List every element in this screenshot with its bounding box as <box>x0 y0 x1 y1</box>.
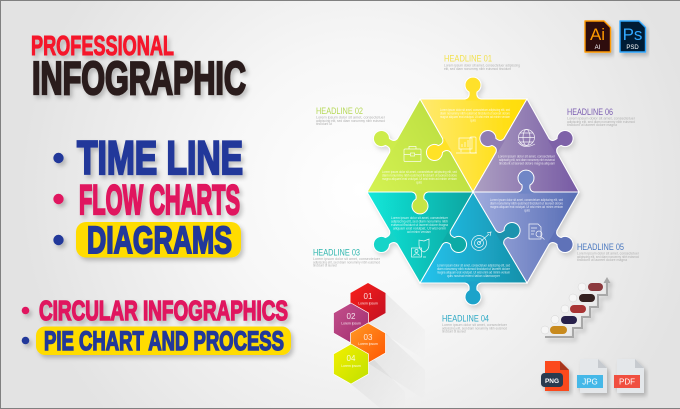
icon: globe <box>518 130 535 147</box>
list item: time line: TIME LINE <box>77 131 243 184</box>
callout: headline 06: Lorem ipsum dolor sit amet, consectetuer <box>567 116 636 120</box>
hexagon 03 <box>350 323 386 363</box>
hexagon 04: Lorem ipsum <box>341 364 361 368</box>
callout: headline 04: Lorem ipsum dolor sit amet, consectetuer <box>442 323 508 327</box>
title: professional infographic: INFOGRAPHIC <box>32 52 246 104</box>
callout: headline 04: adipiscing elit, sed diam nonummy nibh euismod <box>442 326 507 330</box>
text block: periwinkle piece copy <box>490 198 563 212</box>
text block: teal piece copy: euismod tincidunt ut laoreet dolore magna <box>391 223 448 227</box>
icon: photoshop file: PSD <box>626 45 639 51</box>
text block: yellow piece copy: Lorem ipsum dolor sit amet, consectetuer adipiscing elit, sed <box>440 108 510 112</box>
hexagon 03: 03 <box>364 333 373 342</box>
title: professional infographic <box>31 30 246 104</box>
callout: headline 05 <box>577 242 640 262</box>
text block: green piece copy <box>382 170 457 184</box>
step 3 <box>561 305 586 313</box>
piece: green triangle <box>367 99 473 192</box>
icon: photoshop file <box>620 21 646 52</box>
text block: blue piece copy: quis nostrud exerci tation ullamcorper <box>447 274 501 278</box>
text block: teal piece copy <box>391 216 449 234</box>
text block: purple piece copy: Lorem ipsum dolor sit amet, consectetuer <box>498 154 556 158</box>
puzzle hexagon diagram <box>367 77 579 305</box>
callout: headline 06: tincidunt ut laoreet dolore magna <box>567 123 617 127</box>
callout: headline 02: tincidunt ut <box>316 122 332 126</box>
callout: headline 06: HEADLINE 06 <box>567 107 613 117</box>
arrow: staircase line <box>545 277 610 337</box>
text block: green piece copy: magna aliquam erat volutpat. Ut wisi enim ad minim veniam <box>382 177 457 181</box>
callout: headline 03: Lorem ipsum dolor sit amet, consectetuer <box>313 257 381 261</box>
callout: headline 06: adipiscing elit, sed diam nonummy nibh euismod <box>567 120 635 124</box>
list item: flow charts <box>53 176 240 223</box>
text block: blue piece copy: diam nonummy nibh euismod tincidunt ut laoreet dolore <box>437 267 510 271</box>
text block: periwinkle piece copy: Lorem ipsum dolor sit amet, consectetuer adipiscing elit, sed <box>490 198 563 202</box>
text block: teal piece copy: Lorem ipsum dolor sit amet, consectetuer <box>391 216 449 220</box>
text block: yellow piece copy: quis <box>470 118 476 122</box>
step 1 <box>541 326 567 334</box>
list item: flow charts: FLOW CHARTS <box>79 176 240 223</box>
text block: blue piece copy <box>437 264 510 278</box>
step 5 <box>578 283 603 291</box>
text block: purple piece copy: tincidunt ut laoreet dolore magna aliquam <box>499 162 555 166</box>
hexagon 04 <box>334 344 368 384</box>
piece: teal triangle <box>367 192 473 283</box>
piece: yellow triangle <box>420 99 527 192</box>
piece: blue triangle <box>420 192 527 283</box>
text block: blue piece copy: Lorem ipsum dolor sit amet, consectetuer adipiscing elit, sed <box>437 264 510 268</box>
callout: headline 01: HEADLINE 01 <box>444 54 492 64</box>
text block: teal piece copy: ad minim veniam <box>407 230 431 234</box>
text block: teal piece copy: adipiscing elit, sed diam nonummy nibh <box>391 220 448 224</box>
callout: headline 03: tincidunt ut laoreet <box>313 264 337 268</box>
icon: chart and devices <box>456 137 477 153</box>
text block: yellow piece copy: magna aliquam erat volutpat. Ut wisi enim ad minim veniam <box>440 115 510 119</box>
hexagon 03: Lorem ipsum <box>358 342 378 346</box>
callout: headline 05: Lorem ipsum dolor sit amet, consectetuer <box>577 252 640 256</box>
callout: headline 05: tincidunt ut laoreet dolore magna <box>577 258 627 262</box>
callout: headline 03: HEADLINE 03 <box>313 248 360 258</box>
hexagon 04: 04 <box>347 354 356 363</box>
list item: diagrams: DIAGRAMS <box>87 220 232 262</box>
callout: headline 03: adipiscing elit, sed diam nonummy nibh euismod <box>313 260 380 264</box>
piece: periwinkle triangle <box>473 192 579 283</box>
text block: periwinkle piece copy: magna aliquam erat volutpat. Ut wisi enim ad minim veniam <box>490 205 563 209</box>
text block: teal piece copy: aliquam erat volutpat. Ut wisi enim <box>393 226 446 230</box>
hexagon 01: Lorem ipsum <box>358 302 378 306</box>
callout: headline 02: adipiscing elit, sed diam nonummy nibh euismod <box>316 119 385 123</box>
icon: png file: PNG <box>545 378 559 385</box>
callout: headline 02 <box>316 106 386 126</box>
hexagon 02: 02 <box>347 312 356 321</box>
icon: photoshop file: Ps <box>623 25 642 44</box>
hexagon 02 <box>334 303 368 343</box>
callout: headline 01: elit, sed diam nonummy nibh euismod tincidunt <box>444 67 511 71</box>
callout: headline 02: Lorem ipsum dolor sit amet, consectetuer <box>316 116 386 120</box>
list item: circular infographics <box>22 295 288 326</box>
list item: circular infographics: CIRCULAR INFOGRAPHICS <box>39 295 288 326</box>
hexagon 01 <box>350 283 386 323</box>
icon: pdf file: PDF <box>619 378 635 386</box>
title: professional infographic: PROFESSIONAL <box>31 30 174 61</box>
list item: pie chart and process: PIE CHART AND PROCESS <box>44 326 284 356</box>
icon: briefcase <box>404 146 421 162</box>
list item: diagrams <box>53 220 241 262</box>
list item: time line <box>53 131 243 184</box>
staircase arrow process <box>541 277 610 337</box>
text block: blue piece copy: magna aliquam erat volutpat. Ut wisi enim ad minim veniam <box>437 270 510 274</box>
callout: headline 04 <box>442 314 508 334</box>
step 4 <box>569 294 595 302</box>
stacked hexagon process <box>334 283 425 408</box>
text block: periwinkle piece copy: diam nonummy nibh euismod tincidunt ut laoreet dolore <box>490 202 563 206</box>
icon: adobe illustrator file <box>585 21 610 52</box>
icon: png file <box>541 361 569 391</box>
callout: headline 05: HEADLINE 05 <box>577 242 624 252</box>
callout: headline 05: adipiscing elit, sed diam nonummy nibh euismod <box>577 255 639 259</box>
icon: adobe illustrator file: Ai <box>590 25 605 44</box>
callout: headline 02: HEADLINE 02 <box>316 106 363 116</box>
callout: headline 01: Lorem ipsum dolor sit amet, consectetuer adipiscing <box>444 64 520 68</box>
icon: pdf file <box>614 359 644 393</box>
step 2 <box>551 316 577 324</box>
text block: green piece copy: diam nonummy nibh euismod tincidunt ut laoreet dolore <box>382 174 457 178</box>
callout: headline 01 <box>444 54 520 71</box>
text block: yellow piece copy <box>440 108 510 122</box>
list item: pie chart and process <box>22 326 291 356</box>
icon: badge and shield <box>412 239 429 257</box>
icon: jpg file <box>577 359 607 393</box>
callout: headline 04: HEADLINE 04 <box>442 314 489 324</box>
hexagon 01: 01 <box>364 292 373 301</box>
callout: headline 04: tincidunt ut laoreet <box>442 330 466 334</box>
icon: document and magnifier <box>529 224 544 240</box>
text block: periwinkle piece copy: quis <box>524 208 530 212</box>
hexagon 02: Lorem ipsum <box>341 322 361 326</box>
text block: green piece copy: Lorem ipsum dolor sit amet, consectetuer adipiscing elit, sed <box>382 170 457 174</box>
callout: headline 03 <box>313 248 381 268</box>
callout: headline 06 <box>567 107 636 127</box>
piece: purple triangle <box>473 99 579 192</box>
icon: adobe illustrator file: AI <box>595 45 601 51</box>
text block: purple piece copy <box>498 154 556 166</box>
icon: target <box>472 232 491 250</box>
icon: jpg file: JPG <box>582 378 598 386</box>
text block: yellow piece copy: diam nonummy nibh euismod tincidunt ut laoreet dolore <box>440 112 510 116</box>
text block: green piece copy: quis <box>416 180 422 184</box>
text block: purple piece copy: adipiscing elit, sed diam nonummy nibh euismod <box>499 158 555 162</box>
